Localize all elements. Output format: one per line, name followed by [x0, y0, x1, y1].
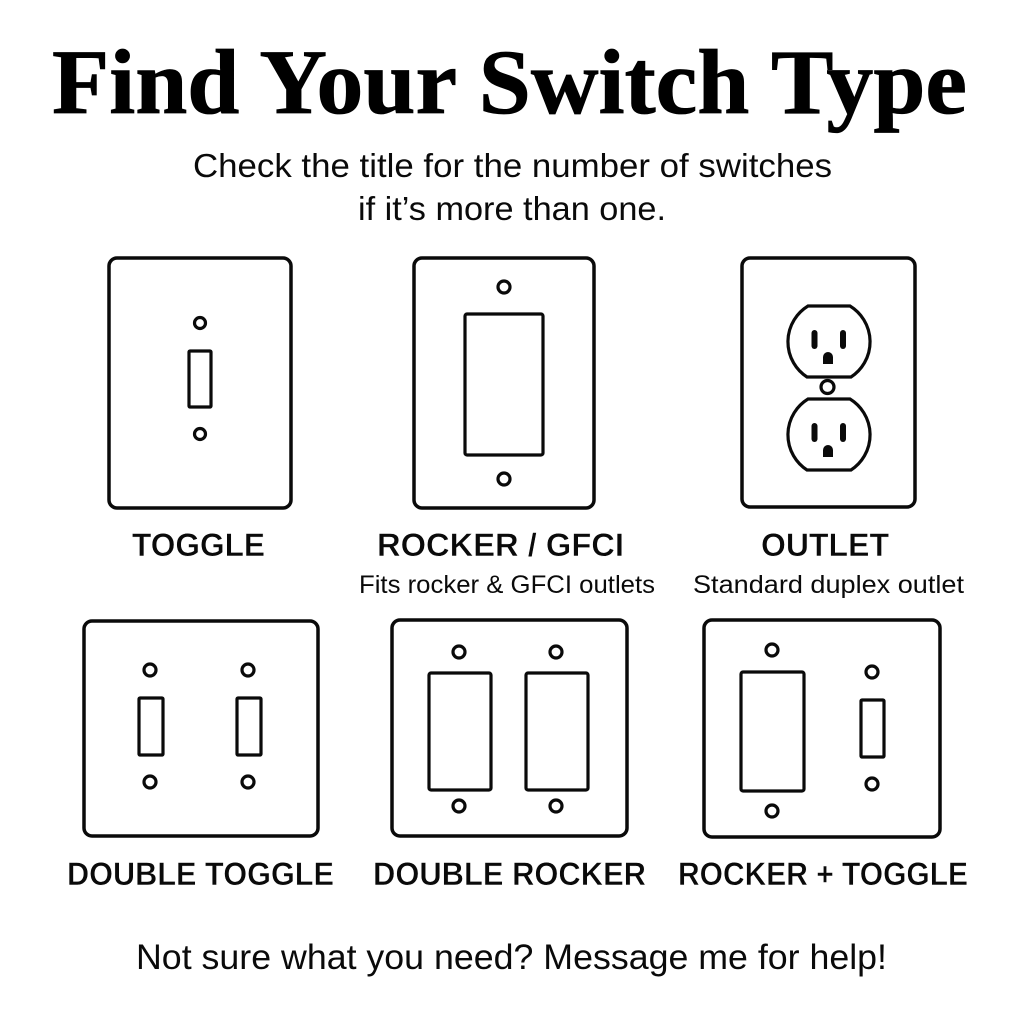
centre screw	[821, 380, 834, 394]
rocker plate	[414, 258, 594, 508]
rocker top screw	[498, 281, 510, 293]
label: outlet: OUTLET	[761, 527, 889, 563]
top receptacle	[788, 306, 870, 377]
toggle plate	[109, 258, 291, 508]
toggle switch	[189, 351, 211, 407]
outlet plate	[742, 258, 915, 507]
subtitle	[193, 147, 832, 227]
panel: double toggle	[84, 621, 318, 836]
double toggle plate	[84, 621, 318, 836]
label: rocker + toggle: ROCKER + TOGGLE	[678, 856, 968, 892]
left rocker	[429, 646, 491, 812]
toggle bottom screw	[194, 428, 206, 440]
title: Find Your Switch Type	[52, 31, 967, 133]
subtitle: if it’s more than one.	[358, 190, 666, 227]
panel: toggle	[109, 258, 291, 508]
panel: double rocker	[392, 620, 627, 836]
left toggle	[139, 664, 163, 788]
footer note: Not sure what you need? Message me for help!	[136, 938, 887, 977]
panel: rocker / GFCI	[414, 258, 594, 508]
caption: rocker / GFCI: Fits rocker & GFCI outlets	[359, 571, 655, 599]
rocker + toggle plate	[704, 620, 940, 837]
double rocker plate	[392, 620, 627, 836]
label: double rocker: DOUBLE ROCKER	[373, 856, 646, 892]
label: rocker / GFCI: ROCKER / GFCI	[377, 527, 624, 563]
label: toggle: TOGGLE	[132, 527, 265, 563]
rocker bottom screw	[498, 473, 510, 485]
panel: rocker + toggle	[704, 620, 940, 837]
right toggle	[237, 664, 261, 788]
toggle	[861, 666, 884, 790]
subtitle: Check the title for the number of switches	[193, 147, 832, 184]
right rocker	[526, 646, 588, 812]
toggle top screw	[194, 318, 206, 328]
bottom receptacle	[788, 399, 870, 470]
rocker switch	[465, 314, 543, 455]
label: double toggle: DOUBLE TOGGLE	[67, 856, 334, 892]
panel: outlet	[742, 258, 915, 507]
caption: outlet: Standard duplex outlet	[693, 571, 964, 599]
rocker	[741, 644, 804, 817]
